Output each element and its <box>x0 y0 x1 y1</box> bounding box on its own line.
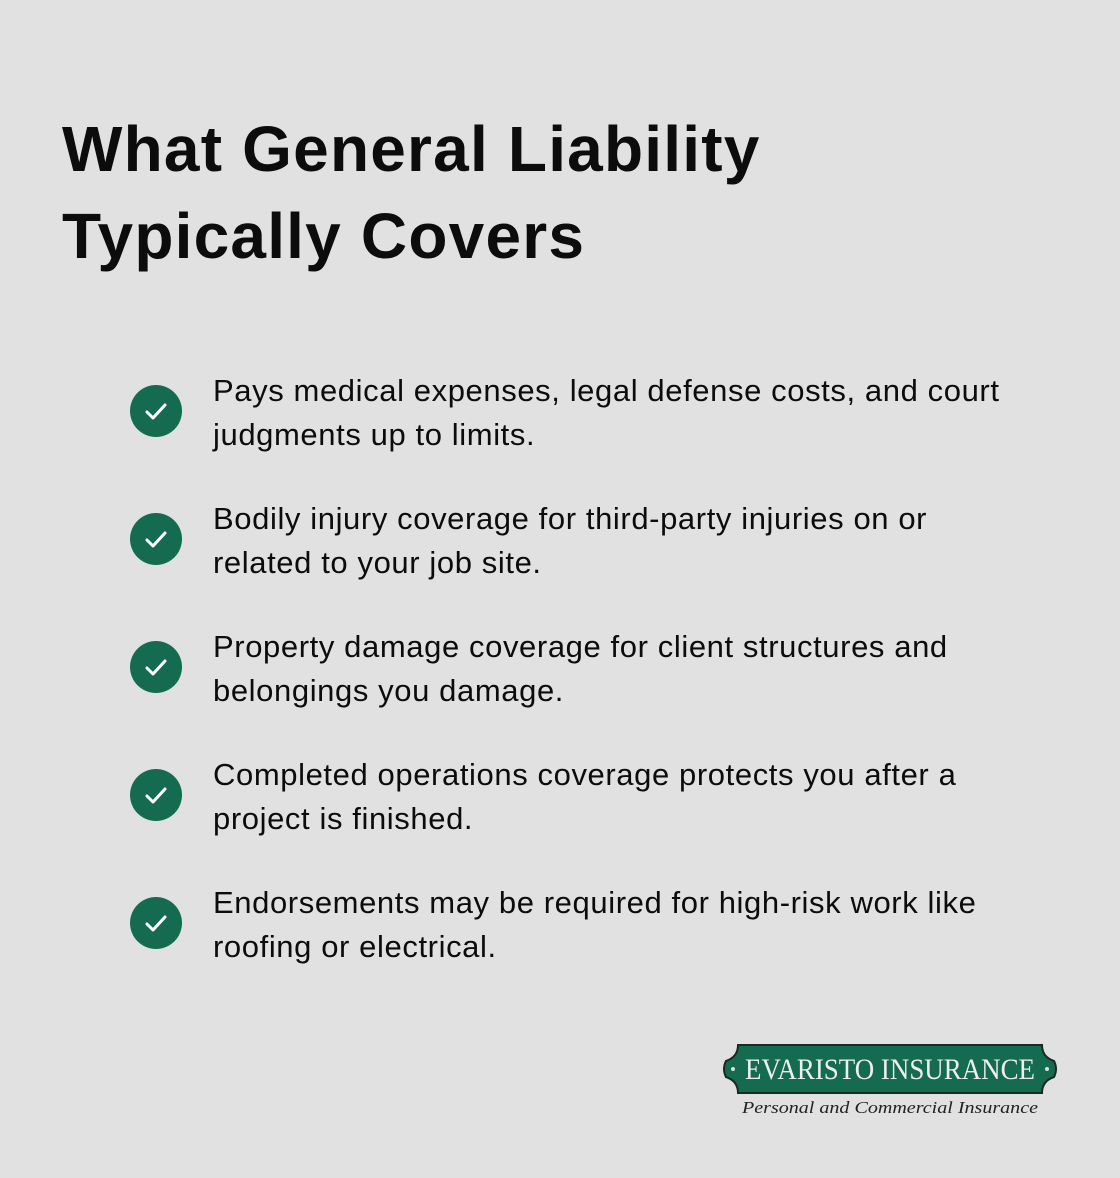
title: Typically Covers <box>62 200 585 272</box>
item 5 <box>130 885 976 964</box>
text: project is finished. <box>213 801 473 836</box>
text: Property damage coverage for client structures and <box>213 629 948 664</box>
text: roofing or electrical. <box>213 929 497 964</box>
text: belongings you damage. <box>213 673 564 708</box>
text <box>213 501 927 580</box>
icon: check <box>130 513 182 565</box>
text: Completed operations coverage protects you after a <box>213 757 956 792</box>
title <box>62 113 761 272</box>
icon: check <box>130 769 182 821</box>
text <box>212 373 1000 452</box>
logo <box>723 1044 1057 1117</box>
icon: check <box>130 897 182 949</box>
item 1 <box>130 373 1000 452</box>
text: Bodily injury coverage for third-party injuries on or <box>213 501 927 536</box>
text: judgments up to limits. <box>213 417 535 452</box>
text: related to your job site. <box>213 545 542 580</box>
logo: Personal and Commercial Insurance <box>741 1098 1039 1117</box>
text <box>213 757 956 836</box>
item 2 <box>130 501 927 580</box>
icon: check <box>130 641 182 693</box>
text: Pays medical expenses, legal defense costs, and court <box>213 373 1000 408</box>
item 3 <box>130 629 948 708</box>
text: Endorsements may be required for high-risk work like <box>213 885 976 920</box>
text <box>213 629 948 708</box>
item 4 <box>130 757 956 836</box>
text <box>213 885 976 964</box>
title: What General Liability <box>62 113 761 185</box>
icon: check <box>130 385 182 437</box>
